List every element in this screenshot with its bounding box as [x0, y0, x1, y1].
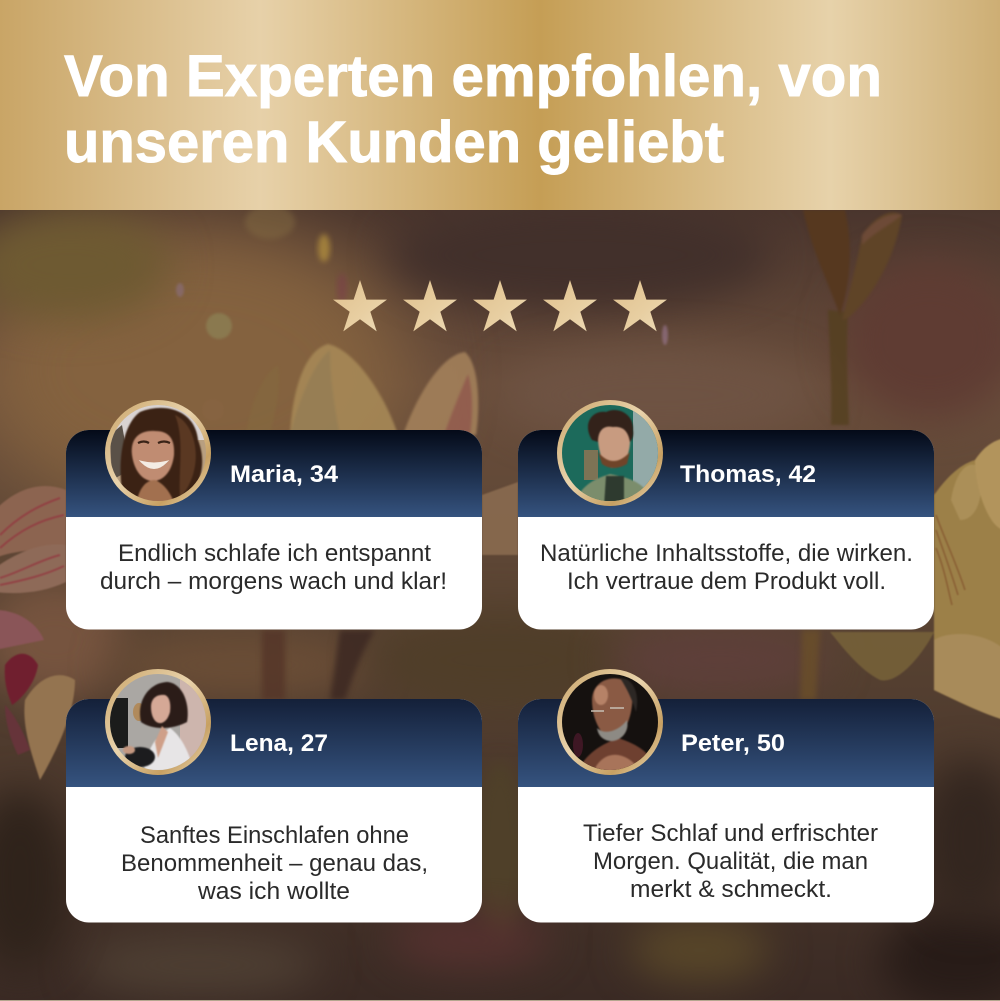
card white body: [518, 699, 934, 922]
panel: review card Peter: [518, 669, 934, 922]
dark stems, lower centre: [262, 630, 820, 700]
reviewer name: Maria, 34: [230, 461, 339, 488]
card navy header: [518, 430, 934, 517]
reviewer name: Lena, 27: [230, 730, 328, 757]
reviewer name: Thomas, 42: [680, 461, 816, 488]
pink striped petals, left: [0, 482, 518, 780]
header banner: [0, 0, 1000, 210]
card white body: [66, 430, 482, 630]
bokeh lights: [175, 210, 669, 346]
review text: [540, 540, 913, 595]
card navy header: [66, 699, 482, 787]
lily petals behind the top cards: [290, 344, 480, 436]
review text: Sanftes Einschlafen ohne: [140, 822, 409, 849]
review text: merkt & schmeckt.: [630, 876, 832, 903]
title: [64, 44, 882, 175]
review text: [121, 822, 428, 905]
title: unseren Kunden geliebt: [64, 110, 724, 175]
avatar: Peter: [557, 669, 663, 780]
avatar: Thomas: [557, 400, 663, 506]
review text: Benommenheit – genau das,: [121, 850, 428, 877]
review text: Natürliche Inhaltsstoffe, die wirken.: [540, 540, 913, 567]
title: Von Experten empfohlen, von: [64, 44, 882, 109]
avatar: Maria: [105, 400, 211, 506]
panel: review card Maria: [66, 400, 482, 630]
review text: Morgen. Qualität, die man: [593, 848, 868, 875]
review text: Ich vertraue dem Produkt voll.: [567, 568, 886, 595]
review text: [583, 820, 878, 903]
flower bud and stem, top right: [803, 210, 902, 425]
review text: Tiefer Schlaf und erfrischter: [583, 820, 878, 847]
review text: Endlich schlafe ich entspannt: [118, 540, 431, 567]
review text: was ich wollte: [197, 878, 350, 905]
card white body: [518, 430, 934, 630]
avatar: Lena: [105, 669, 211, 780]
five star rating: [333, 280, 667, 331]
reviewer name: Peter, 50: [681, 730, 785, 757]
review text: durch – morgens wach und klar!: [100, 568, 447, 595]
review text: [100, 540, 447, 595]
card navy header: [66, 430, 482, 517]
card navy header: [518, 699, 934, 787]
yellow lily, right: [830, 438, 1000, 720]
panel: review card Thomas: [518, 400, 934, 630]
panel: review card Lena: [66, 669, 482, 922]
card white body: [66, 699, 482, 922]
